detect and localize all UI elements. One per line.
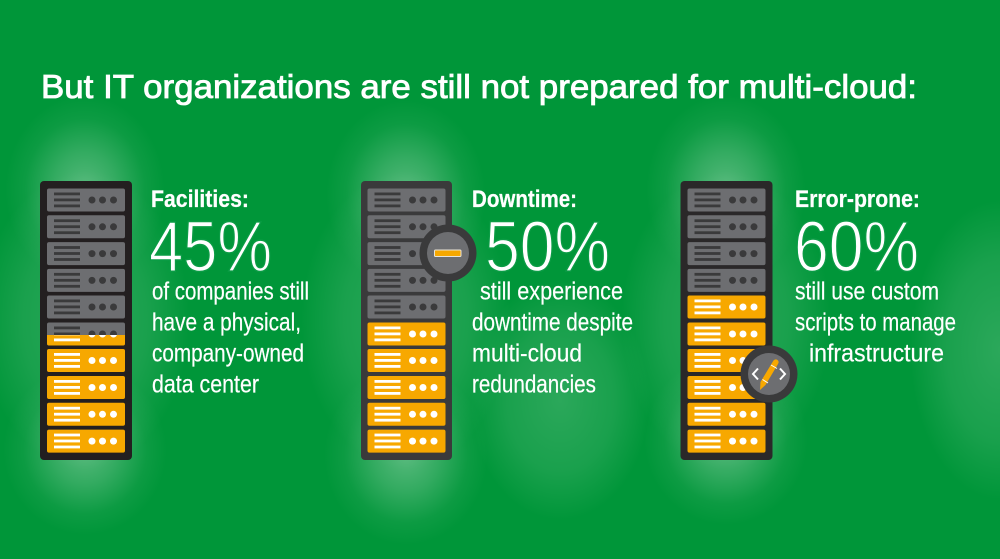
text block: error-prone description: still use custom: [795, 278, 939, 306]
text block: facilities description: [152, 278, 309, 398]
text block: error-prone description: infrastructure: [809, 340, 944, 368]
panel: facilities: [40, 181, 309, 460]
text block: facilities description: data center: [152, 370, 259, 398]
label: facilities: Facilities:: [151, 186, 249, 213]
icon: server rack, downtime: [361, 181, 452, 460]
icon: server rack, error-prone: [680, 181, 772, 460]
text block: downtime description: redundancies: [472, 370, 596, 398]
panel: error-prone: [680, 181, 956, 460]
icon: minus badge: [420, 224, 476, 282]
text block: facilities description: of companies still: [152, 278, 309, 306]
icon: server rack, half filled: [40, 181, 132, 460]
statistic: 50%: 50%: [485, 208, 610, 287]
text block: downtime description: multi-cloud: [472, 340, 582, 368]
text block: downtime description: still experience: [480, 278, 623, 306]
title: But IT organizations are still not prepared for multi-cloud:: [41, 69, 917, 106]
panel: downtime: [361, 181, 633, 460]
text block: facilities description: company-owned: [152, 340, 304, 368]
statistic: 60%: 60%: [794, 208, 919, 287]
icon: code pencil badge: [740, 346, 798, 402]
text block: facilities description: have a physical,: [152, 308, 301, 336]
label: error-prone: Error-prone:: [795, 186, 920, 213]
text block: error-prone description: scripts to manage: [795, 308, 956, 336]
text block: downtime description: downtime despite: [472, 308, 633, 336]
text block: error-prone description: [795, 278, 956, 368]
statistic: 45%: 45%: [149, 208, 272, 287]
label: downtime: Downtime:: [472, 186, 577, 213]
text block: downtime description: [472, 278, 633, 398]
